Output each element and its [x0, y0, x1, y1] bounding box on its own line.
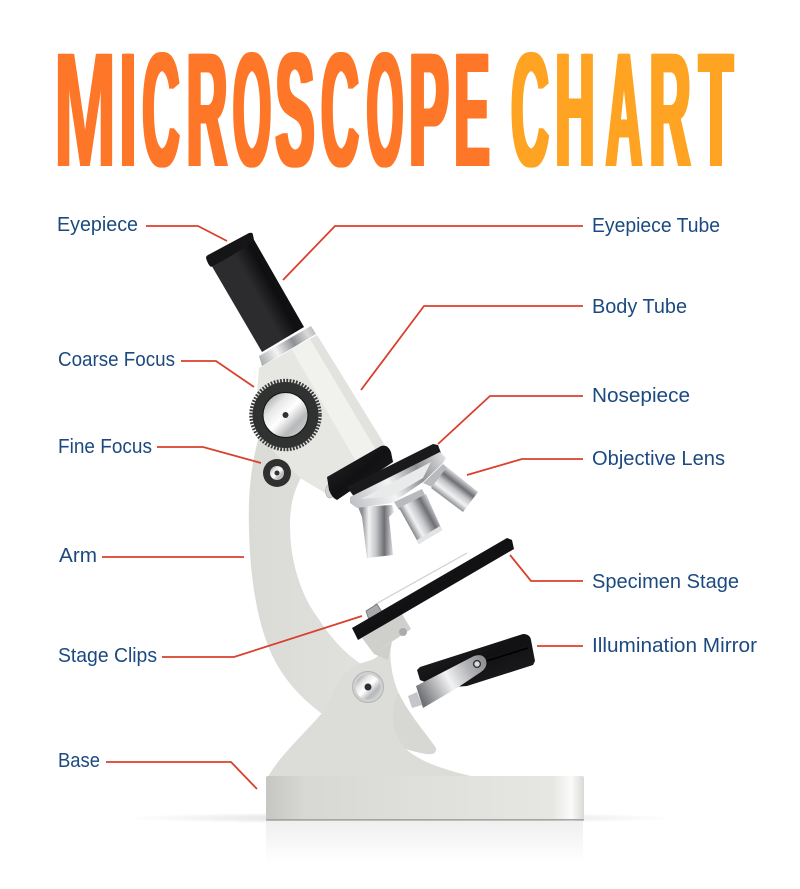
- title: MICROSCOPE: M: [54, 18, 116, 200]
- label: Specimen Stage: Specimen Stage: [592, 571, 739, 593]
- nosepiece black disc: [347, 444, 441, 498]
- base inner fold: [393, 692, 436, 754]
- specimen slide: [374, 553, 467, 605]
- stage support: [362, 614, 411, 660]
- label: Base: Base: [58, 750, 100, 772]
- stage clip: [366, 604, 382, 620]
- microscope illustration: [206, 233, 584, 821]
- black collar: [327, 446, 393, 500]
- objective lens 1: [358, 505, 394, 558]
- title: CHART: H: [555, 18, 595, 200]
- label: Eyepiece Tube: Eyepiece Tube: [592, 215, 720, 237]
- title: MICROSCOPE: P: [410, 18, 449, 200]
- label: Eyepiece: Eyepiece: [57, 214, 138, 236]
- side screw: [326, 484, 334, 498]
- title: CHART: A: [606, 18, 642, 200]
- title: CHART: [511, 18, 734, 200]
- label: Stage Clips: Stage Clips: [58, 645, 157, 667]
- eyepiece tube: [206, 233, 316, 366]
- pointer lines: [102, 226, 583, 789]
- gear ring: [252, 382, 318, 448]
- line: body tube: [361, 306, 583, 390]
- title: MICROSCOPE: S: [276, 18, 315, 200]
- nosepiece silver ring: [350, 452, 446, 508]
- line: arm: [102, 556, 244, 558]
- knob metal cap: [263, 392, 308, 438]
- base plate: [266, 776, 584, 821]
- mirror bracket: [416, 655, 486, 708]
- labels: [57, 214, 757, 772]
- line: stage clips: [162, 616, 362, 657]
- title: MICROSCOPE: E: [454, 18, 489, 200]
- title: MICROSCOPE: C: [321, 18, 358, 200]
- body right face: [310, 335, 383, 450]
- line: fine focus: [157, 447, 261, 463]
- label: Nosepiece: Nosepiece: [592, 385, 690, 407]
- mirror disc: [417, 634, 535, 688]
- title: CHART: R: [650, 18, 690, 200]
- fine focus knob: [263, 459, 291, 487]
- objective lens 2: [394, 489, 442, 544]
- label: Fine Focus: Fine Focus: [58, 436, 152, 458]
- title: CHART: T: [699, 18, 733, 200]
- line: eyepiece tube: [283, 226, 583, 280]
- label: Coarse Focus: Coarse Focus: [58, 349, 175, 371]
- line: nosepiece: [438, 396, 583, 444]
- objective lens 3: [423, 464, 478, 512]
- title: MICROSCOPE: R: [186, 18, 227, 200]
- title: MICROSCOPE: O: [233, 18, 271, 200]
- title: MICROSCOPE: [54, 18, 490, 200]
- arm: [249, 400, 375, 716]
- gear teeth: [251, 380, 320, 450]
- line: objective lens: [467, 459, 583, 475]
- label: Objective Lens: Objective Lens: [592, 448, 725, 470]
- nosepiece: [347, 444, 446, 508]
- body tube: [256, 335, 394, 500]
- body highlight: [292, 339, 380, 465]
- base bottom edge: [266, 819, 584, 821]
- shadow and reflection under base: [125, 812, 675, 863]
- title: MICROSCOPE: I: [120, 18, 136, 200]
- mirror pin: [408, 692, 422, 708]
- label: Body Tube: Body Tube: [592, 296, 687, 318]
- title: CHART: C: [511, 18, 548, 200]
- label: Illumination Mirror: Illumination Mirror: [592, 635, 757, 657]
- tube barrel: [210, 238, 304, 352]
- title: MICROSCOPE: C: [143, 18, 180, 200]
- knob pin: [282, 412, 288, 418]
- line: coarse focus: [181, 361, 254, 387]
- specimen stage: [352, 538, 514, 640]
- mirror screw: [474, 661, 480, 667]
- line: illumination mirror: [537, 645, 583, 647]
- title: MICROSCOPE: O: [367, 18, 403, 200]
- body left face: [256, 335, 394, 500]
- tube cap: [206, 233, 254, 267]
- pivot screw: [352, 672, 384, 702]
- label: Arm: Arm: [59, 545, 97, 567]
- mirror groove: [458, 648, 528, 670]
- nosepiece white disc: [361, 462, 431, 499]
- illumination mirror: [408, 634, 535, 708]
- line: base: [106, 762, 257, 789]
- silver collar: [259, 326, 316, 366]
- line: eyepiece: [146, 226, 227, 241]
- line: specimen stage: [510, 555, 583, 581]
- coarse focus knob: [251, 380, 320, 450]
- base upright: [268, 642, 475, 777]
- stage screw: [399, 628, 407, 636]
